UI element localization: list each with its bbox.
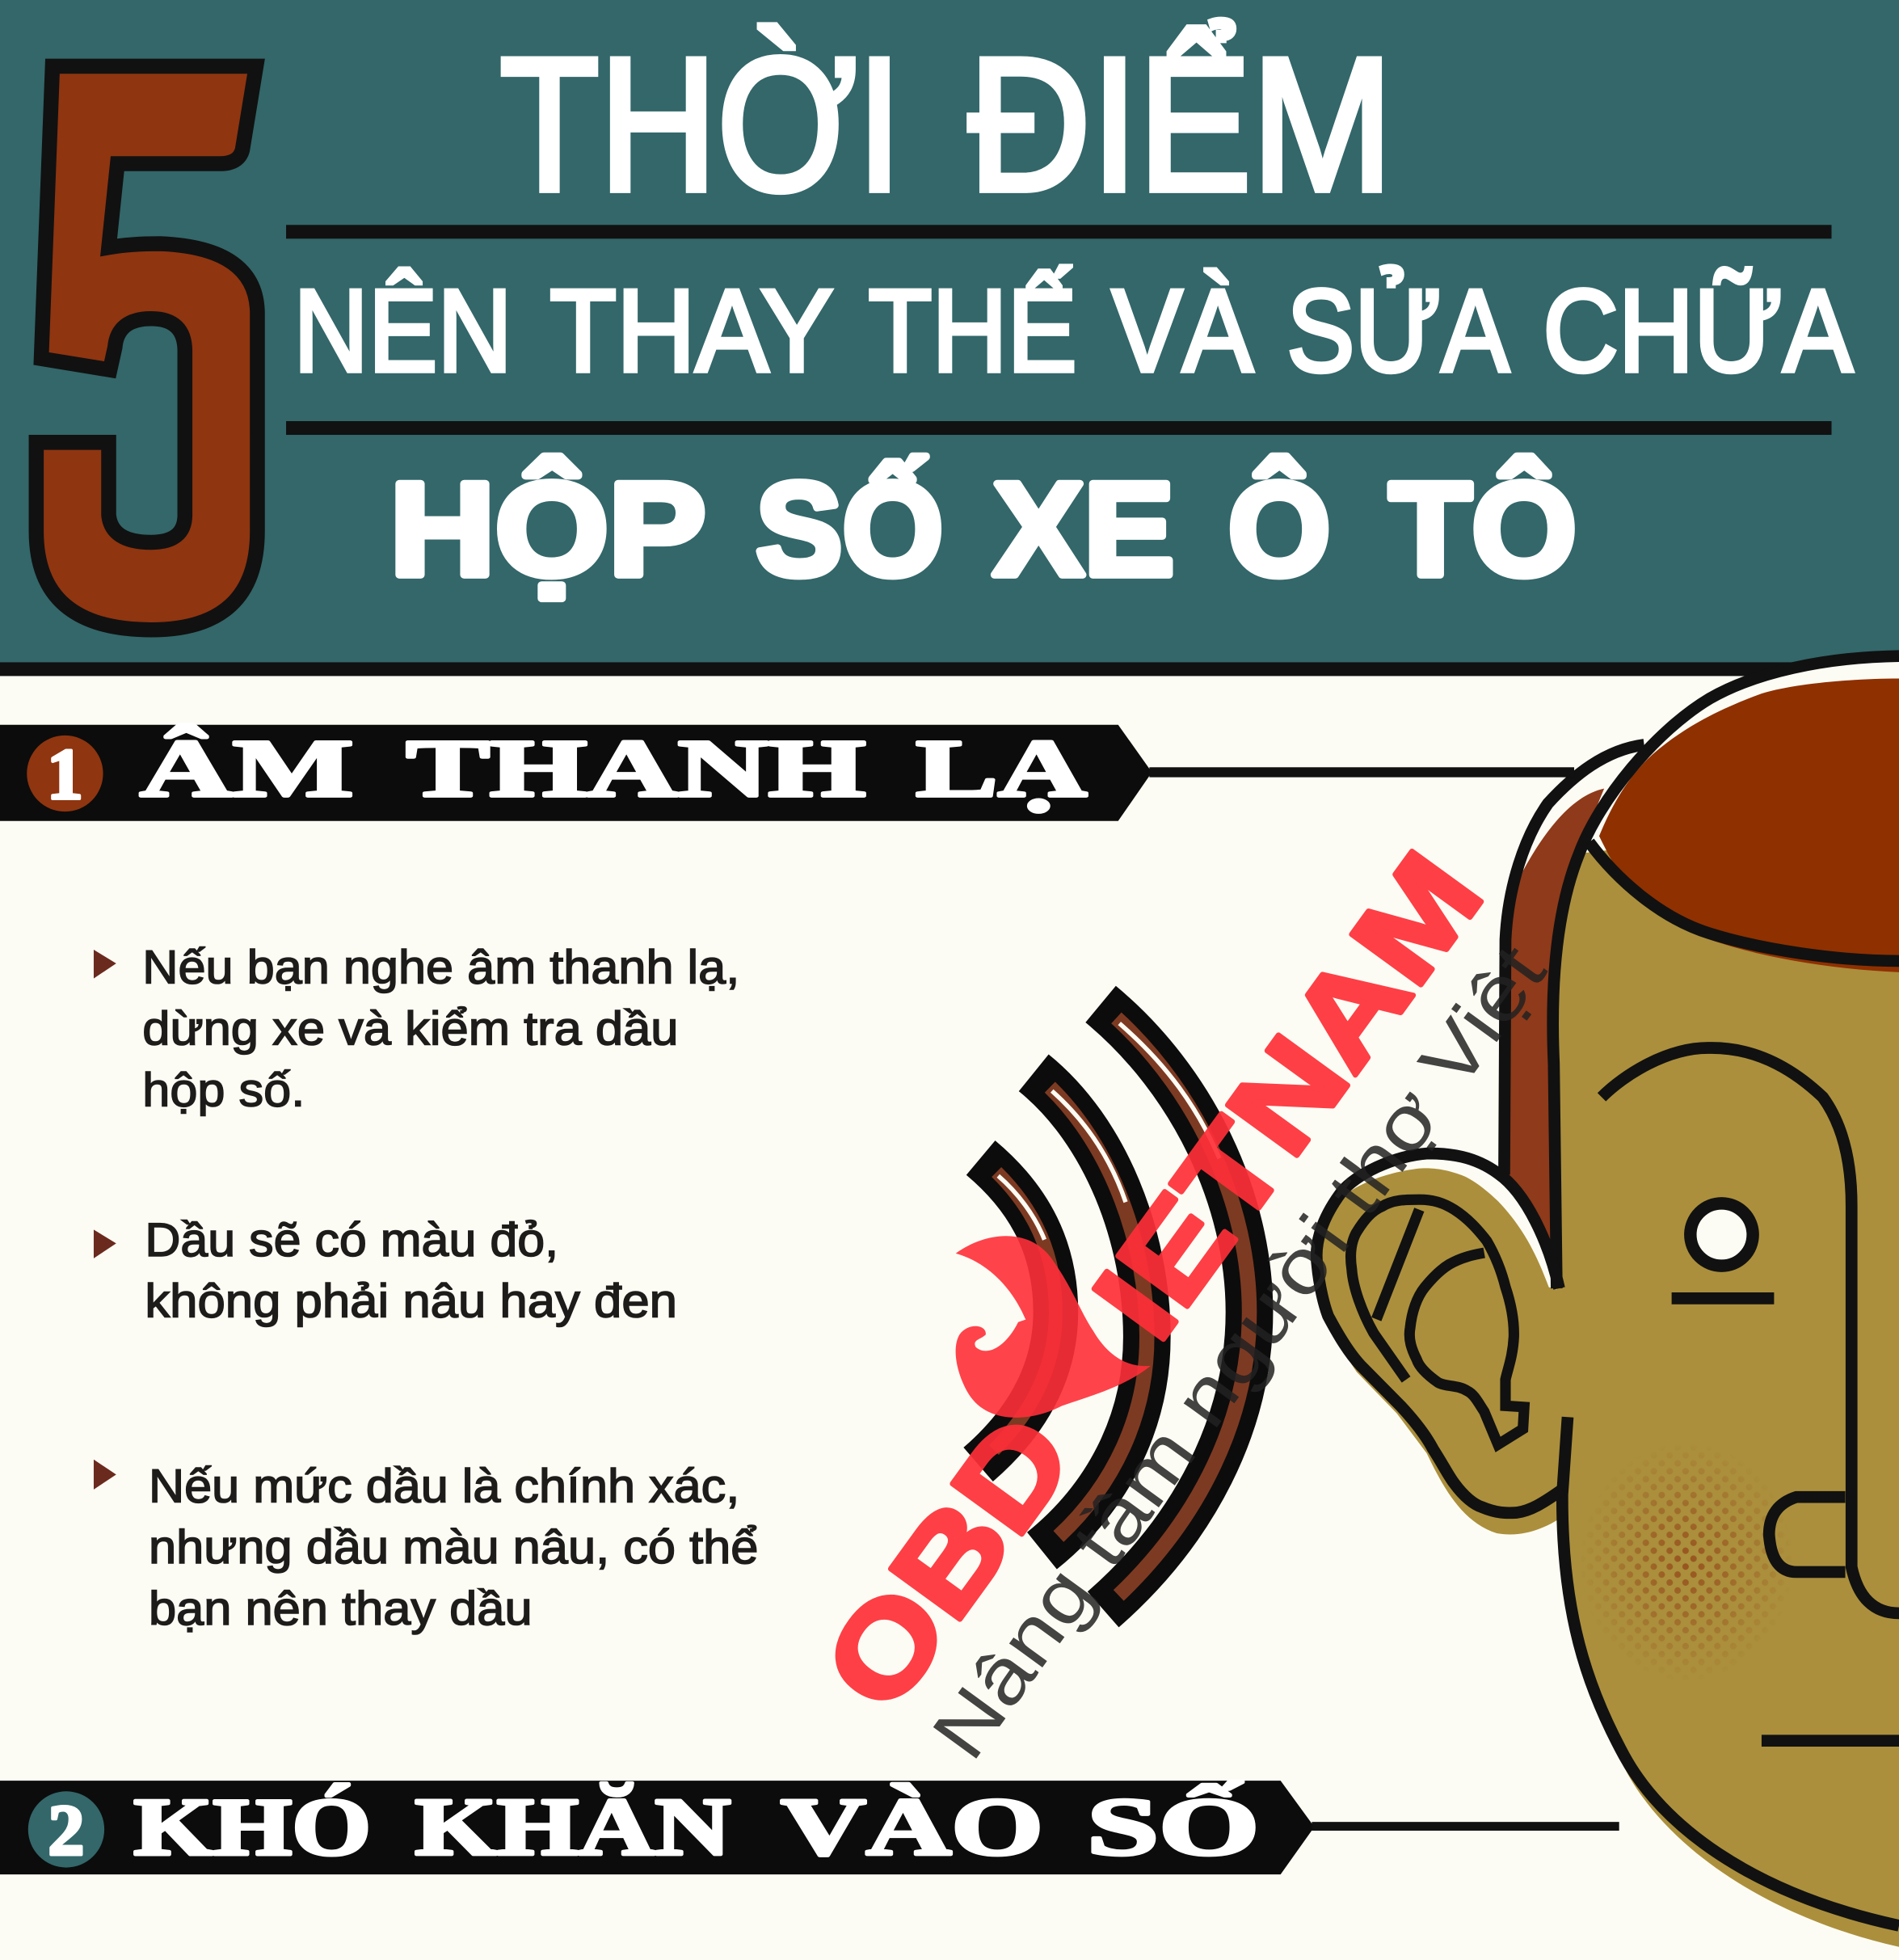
number badge 1 [27, 735, 103, 815]
bullet 3 [94, 1460, 758, 1635]
head outlines [1553, 656, 1899, 1925]
title line 3 [389, 455, 1577, 603]
inner wave [979, 1157, 1055, 1465]
title line 3: HỘP [389, 455, 706, 603]
watermark logo [956, 1236, 1151, 1418]
bullet 1: dừng xe và kiểm tra dầu [142, 1003, 679, 1056]
bullet 3: Nếu mức dầu là chính xác, [149, 1460, 739, 1512]
heading: kho khan vao so [133, 1780, 1259, 1873]
section 1 text [94, 942, 758, 1635]
watermark name OBD: OBD [797, 1390, 1100, 1734]
face fill [1553, 824, 1899, 1947]
bullet 1: Nếu bạn nghe âm thanh lạ, [142, 942, 739, 994]
heading: am thanh la: ÂM [140, 723, 354, 815]
section 2 banner [0, 1780, 1619, 1874]
title line 2: CHỮA [1543, 264, 1853, 396]
title line 1: ĐIỂM [968, 18, 1393, 230]
title line 2: THAY [549, 264, 833, 396]
hair behind ear [1504, 744, 1644, 1250]
eye [1691, 1203, 1753, 1266]
ear lines [1316, 1153, 1562, 1513]
title line 2: VÀ [1112, 264, 1253, 396]
watermark slogan: Nâng tầm người thợ Việt [916, 930, 1562, 1774]
heading: kho khan vao so: SỐ [1087, 1780, 1259, 1873]
title line 3: TÔ [1389, 455, 1577, 603]
bullet 3: bạn nên thay dầu [149, 1583, 533, 1635]
bullet 1: hộp số. [142, 1064, 305, 1116]
big numeral 5 [36, 66, 257, 630]
heading: am thanh la: THANH [406, 723, 865, 815]
title line 2: NÊN [293, 264, 512, 396]
title line 3: XE [993, 455, 1174, 603]
cheek halftone [1595, 1458, 1779, 1665]
ear fill [1320, 1168, 1569, 1535]
title line 1 [499, 18, 1393, 230]
bullet 2: Dầu sẽ có màu đỏ, [145, 1214, 558, 1267]
heading: am thanh la [140, 723, 1087, 815]
title line 3: SỐ [756, 455, 943, 603]
title line 2: SỬA [1286, 264, 1510, 396]
panel: header [0, 0, 1899, 676]
cream gap above the hair [1579, 656, 1899, 854]
number badge 2: 2 [48, 1790, 84, 1870]
number badge 1: 1 [47, 735, 83, 815]
title line 2 [293, 264, 1853, 396]
middle wave [1034, 1073, 1147, 1551]
bullet 2 [94, 1214, 677, 1328]
heading: am thanh la: LẠ [916, 723, 1087, 815]
title line 2: THẾ [869, 264, 1077, 396]
hair top [1599, 679, 1899, 972]
heading: kho khan vao so: VÀO [781, 1781, 1043, 1873]
icon: sound waves [979, 1004, 1249, 1609]
number badge 2 [28, 1790, 104, 1870]
bullet 2: không phải nâu hay đen [145, 1275, 677, 1328]
outer wave [1101, 1004, 1249, 1609]
watermark [797, 828, 1562, 1774]
section 1 banner [0, 723, 1574, 821]
title line 3: Ô [1228, 455, 1331, 603]
title line 1: THỜI [499, 18, 902, 230]
heading: kho khan vao so: KHĂN [415, 1781, 731, 1873]
bullet 3: nhưng dầu màu nâu, có thể [149, 1521, 758, 1574]
heading: kho khan vao so: KHÓ [133, 1781, 371, 1873]
illustration: face with ear [1316, 656, 1899, 1947]
bullet 1 [94, 942, 739, 1116]
